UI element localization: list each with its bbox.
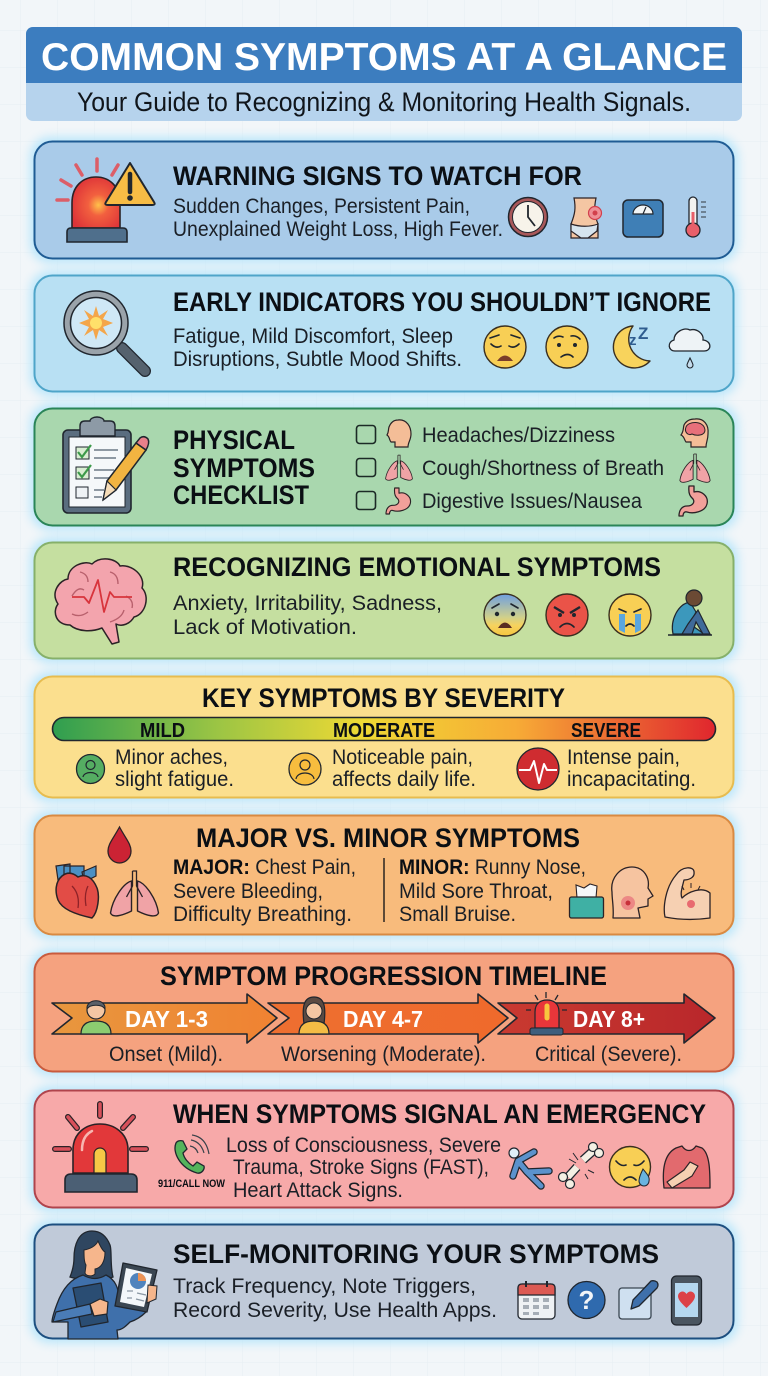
severity gradient bar: SEVERE — [571, 720, 641, 742]
body text: Record Severity, Use Health Apps. — [173, 1298, 497, 1322]
icon: head with brain — [681, 419, 708, 447]
major list: MAJOR: Chest Pain, — [173, 855, 356, 879]
body text — [226, 1133, 501, 1202]
panel: major vs minor — [34, 816, 734, 934]
body text: Trauma, Stroke Signs (FAST), — [233, 1155, 489, 1179]
major list: Severe Bleeding, — [173, 879, 323, 903]
panel: early indicators — [34, 276, 734, 392]
panel: emergency — [34, 1090, 734, 1208]
timeline captions — [109, 1042, 682, 1066]
icon: phone call — [175, 1135, 209, 1173]
icon: arm with bruise — [664, 868, 710, 919]
icon: stomach — [679, 486, 707, 516]
body text: Heart Attack Signs. — [233, 1178, 403, 1202]
body text — [173, 194, 503, 241]
icon: woman with tablet — [52, 1231, 157, 1339]
icon: worried face — [546, 326, 588, 368]
body text: Disruptions, Subtle Mood Shifts. — [173, 347, 462, 371]
timeline captions: Critical (Severe). — [535, 1042, 682, 1066]
checklist row: cough: Cough/Shortness of Breath — [422, 456, 664, 480]
severity gradient bar: MODERATE — [333, 720, 435, 742]
icon: siren with warning triangle — [57, 159, 155, 242]
timeline captions: Onset (Mild). — [109, 1042, 223, 1066]
icon: magnifying glass — [64, 291, 145, 371]
minor list: MINOR: Runny Nose, — [399, 855, 586, 879]
heading — [173, 425, 315, 510]
checklist row: digestive — [356, 488, 642, 514]
icon: phone with heart — [672, 1276, 702, 1325]
severe column: Intense pain, — [567, 745, 680, 769]
panel: timeline — [34, 954, 734, 1072]
mild column: Minor aches, — [115, 745, 228, 769]
icon: clock — [508, 198, 548, 236]
heading: WHEN SYMPTOMS SIGNAL AN EMERGENCY — [173, 1099, 706, 1129]
icon: lungs — [110, 871, 158, 916]
mild column — [76, 745, 234, 791]
heading: CHECKLIST — [173, 480, 309, 510]
panel: emotional symptoms — [34, 542, 734, 658]
heading: PHYSICAL — [173, 425, 295, 455]
panel: self-monitoring — [34, 1224, 734, 1339]
heading: SYMPTOM PROGRESSION TIMELINE — [160, 961, 607, 991]
major list: Difficulty Breathing. — [173, 902, 352, 926]
body text: Track Frequency, Note Triggers, — [173, 1274, 476, 1298]
icon: moon and zzz: z — [629, 332, 636, 349]
checklist row: digestive: Digestive Issues/Nausea — [422, 489, 642, 513]
subtitle: Your Guide to Recognizing & Monitoring Health Signals. — [77, 87, 691, 117]
heading: EARLY INDICATORS YOU SHOULDN’T IGNORE — [173, 287, 711, 317]
body text: Unexplained Weight Loss, High Fever. — [173, 217, 503, 241]
heading: RECOGNIZING EMOTIONAL SYMPTOMS — [173, 552, 661, 582]
icon: emergency siren — [55, 1104, 146, 1192]
severe column: incapacitating. — [567, 767, 696, 791]
moderate column: affects daily life. — [332, 767, 476, 791]
body text: Loss of Consciousness, Severe — [226, 1133, 501, 1157]
icon: question mark — [568, 1282, 605, 1318]
checklist row: headaches: Headaches/Dizziness — [422, 423, 615, 447]
icon: question mark: ? — [579, 1285, 594, 1315]
heading: SELF-MONITORING YOUR SYMPTOMS — [173, 1239, 659, 1269]
heading: KEY SYMPTOMS BY SEVERITY — [202, 683, 565, 713]
arrow: day 8+ — [498, 992, 715, 1043]
icon: lungs — [680, 454, 710, 482]
icon: falling person — [509, 1148, 549, 1186]
minor list — [399, 855, 586, 926]
moderate column — [289, 745, 476, 791]
icon: heart — [56, 864, 98, 918]
icon: anxious face — [484, 594, 526, 636]
icon: clipboard and pencil — [63, 417, 149, 513]
icon: rain cloud — [669, 329, 710, 368]
callout: call now: 911/CALL NOW — [158, 1178, 226, 1190]
icon: notepad and pen — [619, 1281, 658, 1319]
heading: SYMPTOMS — [173, 453, 315, 483]
minor list: Small Bruise. — [399, 902, 516, 926]
severity gradient bar — [52, 718, 716, 742]
arrow: day 1-3 — [52, 994, 277, 1043]
panel: severity — [34, 676, 734, 798]
icon: neck with sore throat — [612, 867, 653, 918]
body text — [173, 591, 442, 639]
icon: brain with pulse — [55, 559, 146, 644]
mild column: slight fatigue. — [115, 767, 234, 791]
icon: tissue box — [570, 884, 604, 918]
timeline captions: Worsening (Moderate). — [281, 1042, 486, 1066]
severity gradient bar: MILD — [140, 720, 185, 742]
checklist row: headaches — [356, 420, 615, 447]
icon: chest pain — [663, 1146, 710, 1188]
major list — [173, 855, 356, 926]
body text: Fatigue, Mild Discomfort, Sleep — [173, 324, 453, 348]
header banner — [26, 27, 742, 121]
body text: Lack of Motivation. — [173, 615, 357, 639]
icon: thermometer — [686, 197, 706, 237]
icon: sitting sad person — [668, 590, 712, 635]
severe column — [517, 745, 696, 791]
icon: blood drop — [108, 827, 131, 863]
arrow: day 1-3: DAY 1-3 — [125, 1006, 208, 1032]
body text — [173, 324, 462, 371]
body text: Anxiety, Irritability, Sadness, — [173, 591, 442, 615]
minor list: Mild Sore Throat, — [399, 879, 553, 903]
icon: tired face — [484, 326, 526, 368]
icon: broken bone — [558, 1142, 604, 1188]
arrow: day 4-7: DAY 4-7 — [343, 1006, 423, 1032]
heading: MAJOR VS. MINOR SYMPTOMS — [196, 823, 580, 853]
moderate column: Noticeable pain, — [332, 745, 473, 769]
panel: warning signs — [34, 142, 734, 258]
icon: moon and zzz: Z — [638, 324, 648, 343]
icon: crying face — [609, 594, 651, 636]
body text — [173, 1274, 497, 1322]
arrow: day 8+: DAY 8+ — [573, 1006, 645, 1032]
icon: weighing scale — [623, 200, 663, 237]
body text: Sudden Changes, Persistent Pain, — [173, 194, 470, 218]
heading: WARNING SIGNS TO WATCH FOR — [173, 161, 582, 191]
icon: angry face — [546, 594, 588, 636]
divider — [383, 858, 385, 922]
arrow: day 4-7 — [268, 994, 508, 1043]
title: COMMON SYMPTOMS AT A GLANCE — [41, 36, 727, 79]
icon: sad tearful face — [610, 1146, 650, 1188]
panel: physical symptoms checklist — [34, 408, 734, 526]
icon: abdomen pain — [571, 198, 602, 238]
icon: moon and zzz — [613, 324, 650, 368]
icon: calendar — [518, 1281, 555, 1319]
